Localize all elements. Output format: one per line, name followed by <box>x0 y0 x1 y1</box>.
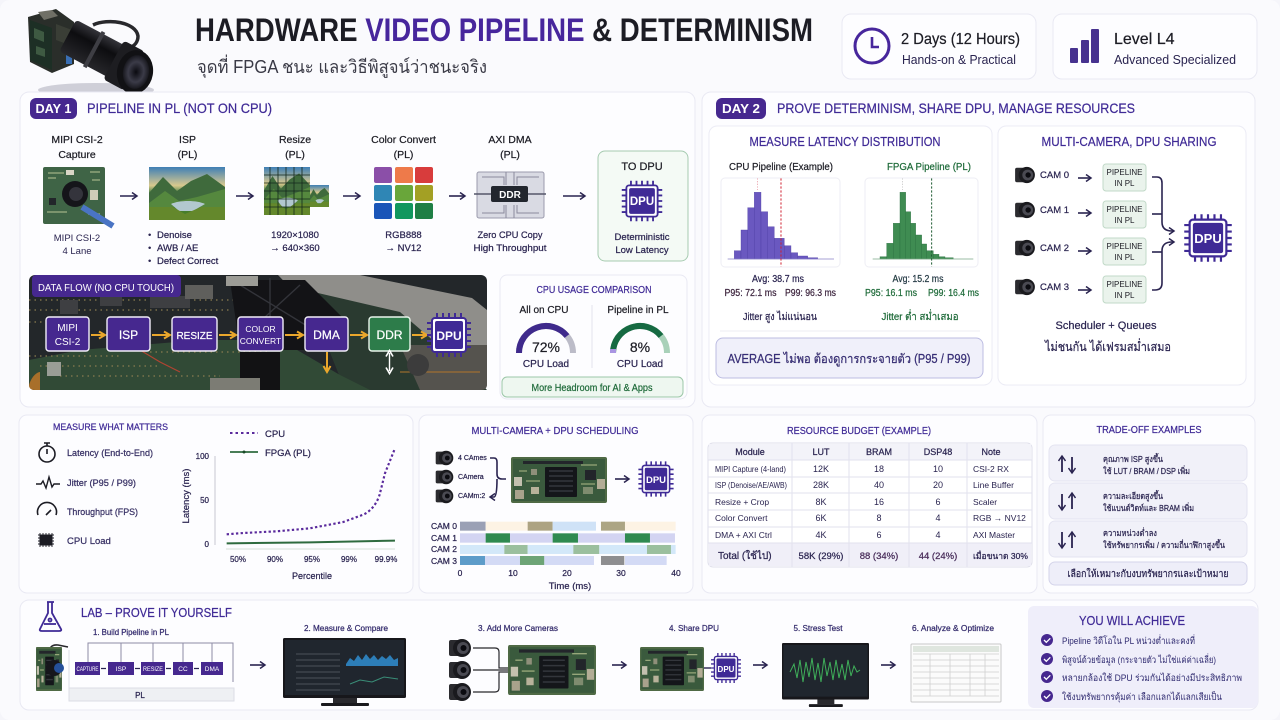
gantt chart: 0 <box>458 568 463 578</box>
stage: AXI DMA: DDR <box>499 190 522 201</box>
panel: measure what matters: Throughput (FPS) <box>67 507 138 518</box>
stage: resize: Resize <box>279 134 311 146</box>
panel: multi-camera DPU sharing: MULTI-CAMERA, DPU SHARING <box>1042 134 1216 149</box>
stage: MIPI capture: 4 Lane <box>62 246 92 257</box>
stats: CPU: Avg: 38.7 ms <box>752 274 804 285</box>
to DPU card: TO DPU <box>621 161 663 173</box>
step 5: stress test: 5. Stress Test <box>794 623 843 633</box>
stage: MIPI capture: MIPI CSI-2 <box>51 134 103 146</box>
panel: CPU usage comparison: CPU USAGE COMPARISON <box>536 285 652 296</box>
camera rows: IN PL <box>1114 179 1135 188</box>
stage: MIPI capture: Capture <box>58 149 96 161</box>
duration card: Hands-on & Practical <box>902 53 1016 67</box>
background photo: board <box>29 275 487 390</box>
day 2 heading: PROVE DETERMINISM, SHARE DPU, MANAGE RESOURCES <box>777 100 1135 116</box>
table: 10 <box>933 464 943 474</box>
panel: latency distribution: FPGA Pipeline (PL) <box>887 161 971 173</box>
panel: day 2 <box>702 92 1255 407</box>
arrow <box>343 195 360 197</box>
trade-off: resolution: ความละเอียดสูงขึ้น <box>1103 490 1163 502</box>
table: 16 <box>874 497 884 507</box>
to DPU card: Low Latency <box>615 245 669 256</box>
gauge: all on CPU: 72% <box>532 339 560 355</box>
stage: resize <box>264 134 329 254</box>
table: DMA + AXI Ctrl <box>715 530 772 540</box>
icon: DPU: DPU <box>646 475 666 486</box>
stage: MIPI capture <box>43 134 113 257</box>
table: Line Buffer <box>973 480 1014 490</box>
line chart: latency by percentile: FPGA (PL) <box>265 448 311 459</box>
panel: trade-off examples <box>1043 415 1255 593</box>
gantt chart: 30 <box>616 568 626 578</box>
gantt chart: 10 <box>508 568 518 578</box>
histogram: CPU <box>721 178 840 267</box>
flow nodes: RESIZE <box>176 331 213 342</box>
arrow <box>612 664 626 666</box>
flow nodes: MIPI <box>57 323 78 334</box>
stage: resize: → 640×360 <box>270 243 320 254</box>
table: Color Convert <box>715 513 768 523</box>
camera rows: PIPELINE <box>1106 168 1143 177</box>
day 2 badge <box>716 98 766 119</box>
stats: FPGA: Avg: 15.2 ms <box>892 274 944 285</box>
hero image: camera module <box>28 9 157 97</box>
to DPU card <box>598 151 688 261</box>
line chart: latency by percentile <box>181 429 397 581</box>
panel: measure what matters <box>19 415 413 593</box>
line chart: latency by percentile: 95% <box>304 555 320 564</box>
stats: CPU <box>724 274 836 323</box>
data flow label: DATA FLOW (NO CPU TOUCH) <box>38 282 174 294</box>
panel: lab <box>20 600 1258 710</box>
stage: AXI DMA: AXI DMA <box>488 134 532 146</box>
camera rows: CAM 3 <box>1040 282 1069 293</box>
stage: resize: (PL) <box>285 149 305 161</box>
table: 6 <box>876 530 882 540</box>
step 1: build pipeline <box>36 627 234 701</box>
icon: DPU <box>638 461 674 497</box>
duration card <box>842 14 1036 79</box>
achievement 1: Pipeline วิดีโอใน PL หน่วงต่ำและคงที่ <box>1062 634 1195 647</box>
flow nodes: ISP <box>119 328 138 342</box>
gantt chart: CAM 1 <box>431 533 457 543</box>
step 2: measure and compare <box>283 623 406 706</box>
stage: AXI DMA: (PL) <box>500 149 520 161</box>
stage: resize: 1920×1080 <box>271 230 319 241</box>
camera rows: IN PL <box>1114 291 1135 300</box>
table: MIPI Capture (4-land) <box>715 464 786 474</box>
stage: ISP: • <box>148 243 151 254</box>
line chart: latency by percentile: Latency (ms) <box>181 469 192 523</box>
achievement 3 <box>1041 671 1242 684</box>
table: Note <box>981 447 1001 457</box>
table: Resize + Crop <box>715 497 769 507</box>
gantt chart: 40 <box>671 568 681 578</box>
line chart: latency by percentile: 50% <box>230 555 246 564</box>
panel: resource budget <box>702 415 1037 593</box>
flow nodes: DMA <box>313 328 340 342</box>
step 3: add more cameras <box>449 623 596 701</box>
table: 8 <box>876 513 882 523</box>
camera rows: PIPELINE <box>1106 205 1143 214</box>
icon: stopwatch <box>39 443 55 462</box>
camera rows: CAM 1 <box>1040 205 1069 216</box>
level card: Level L4 <box>1114 31 1175 48</box>
camera rows <box>1015 164 1146 303</box>
trade-off: resolution <box>1049 483 1247 519</box>
table: RGB → NV12 <box>973 513 1026 523</box>
table: Module <box>735 447 765 457</box>
step 5: stress test <box>782 623 869 707</box>
trade-off summary: เลือกให้เหมาะกับงบทรัพยากรและเป้าหมาย <box>1068 568 1228 580</box>
stage: ISP: Defect Correct <box>157 256 219 267</box>
histogram: FPGA <box>865 178 978 267</box>
stage: color convert <box>371 134 436 254</box>
panel: latency distribution: MEASURE LATENCY DISTRIBUTION <box>750 134 940 149</box>
icon: level bars <box>1070 29 1099 63</box>
arrow <box>563 195 585 197</box>
icon: jitter <box>36 477 60 488</box>
panel: measure what matters: Jitter (P95 / P99) <box>67 478 136 489</box>
table: 6 <box>935 497 941 507</box>
line chart: latency by percentile: 90% <box>267 555 283 564</box>
step 1: build pipeline: ISP <box>116 666 126 673</box>
table: 12K <box>813 464 829 474</box>
stage: color convert: Color Convert <box>371 134 436 146</box>
title: HARDWARE VIDEO PIPELINE & DETERMINISM <box>195 12 813 48</box>
table: 8K <box>815 497 827 507</box>
panel: multi-camera scheduling <box>419 415 693 593</box>
cameras <box>436 451 487 503</box>
day 1 badge: DAY 1 <box>36 102 72 116</box>
step 6: analyze: 6. Analyze & Optimize <box>912 623 994 633</box>
table: Scaler <box>973 497 997 507</box>
panel: data flow <box>29 275 487 390</box>
gantt chart: CAM 3 <box>431 556 457 566</box>
gauge: pipeline in PL: 8% <box>630 339 650 355</box>
camera rows: IN PL <box>1114 253 1135 262</box>
flow nodes: DDR <box>376 328 403 342</box>
trade-off: ISP quality <box>1049 445 1247 481</box>
bracket arrow <box>490 458 506 497</box>
flow nodes: COLOR <box>245 324 276 334</box>
stage: ISP: Denoise <box>157 230 192 241</box>
achievement 2: พิสูจน์ด้วยข้อมูล (กระจายตัว ไม่ใช่แค่ค่าเฉลี่ย) <box>1062 653 1216 666</box>
cameras: CAmera <box>458 474 484 481</box>
trade-off: latency: ความหน่วงต่ำลง <box>1103 527 1157 538</box>
stats: FPGA: Jitter ต่ำ สม่ำเสมอ <box>882 309 958 323</box>
panel: trade-off examples: TRADE-OFF EXAMPLES <box>1096 424 1202 436</box>
panel: multi-camera scheduling: MULTI-CAMERA + DPU SCHEDULING <box>472 425 638 437</box>
line chart: latency by percentile: 99% <box>341 555 357 564</box>
step 1: build pipeline: CAPTURE <box>76 667 98 673</box>
step 4: share DPU: DPU <box>718 665 735 674</box>
camera rows: PIPELINE <box>1106 280 1143 289</box>
icon: DPU: DPU <box>1194 231 1222 246</box>
stats: CPU: Jitter สูง ไม่แน่นอน <box>743 310 817 323</box>
level card: Advanced Specialized <box>1114 53 1236 67</box>
step 4: share DPU <box>640 623 741 691</box>
step 1: build pipeline: RESIZE <box>143 667 163 673</box>
arrow <box>120 195 137 197</box>
achievement 4 <box>1041 690 1222 703</box>
callout: average not enough <box>716 338 983 378</box>
panel: measure what matters: Latency (End-to-End) <box>67 448 153 459</box>
table <box>708 443 1032 567</box>
stats: CPU: P99: 96.3 ms <box>785 288 836 299</box>
stage: color convert: → NV12 <box>386 243 421 254</box>
line chart: latency by percentile: 100 <box>196 452 210 461</box>
headroom callout <box>502 377 683 397</box>
gauge: all on CPU: CPU Load <box>523 359 569 370</box>
panel: CPU usage comparison: Pipeline in PL <box>607 305 669 316</box>
step 1: build pipeline: CC <box>178 666 188 673</box>
gantt chart: Time (ms) <box>549 581 591 592</box>
panel: multi-camera DPU sharing: Scheduler + Queues <box>1056 320 1157 332</box>
stage: AXI DMA: Zero CPU Copy <box>478 230 543 241</box>
panel: latency distribution <box>709 126 992 385</box>
trade-off: resolution: ใช้แบนด์วิดท์และ BRAM เพิ่ม <box>1103 502 1194 513</box>
icon: flask <box>40 602 61 631</box>
table: 4 <box>935 530 941 540</box>
table: 18 <box>874 464 884 474</box>
camera rows: CAM 2 <box>1040 243 1069 254</box>
stats: FPGA: P95: 16.1 ms <box>865 288 917 299</box>
line chart: latency by percentile: CPU <box>265 429 285 440</box>
trade-off: ISP quality: ใช้ LUT / BRAM / DSP เพิ่ม <box>1103 465 1190 476</box>
panel: measure what matters: CPU Load <box>67 536 111 547</box>
arrow <box>753 664 767 666</box>
trade-off summary <box>1049 562 1247 585</box>
stage: ISP: • <box>148 256 151 267</box>
achievement 1 <box>1041 634 1195 647</box>
flow nodes: CONVERT <box>240 336 281 346</box>
table: 88 (34%) <box>860 551 898 562</box>
duration card: 2 Days (12 Hours) <box>901 31 1020 48</box>
table: Total (ใช้ไป) <box>718 550 772 562</box>
table: 4K <box>815 530 827 540</box>
trade-off: latency <box>1049 521 1247 557</box>
camera rows: PIPELINE <box>1106 242 1143 251</box>
lab heading: LAB – PROVE IT YOURSELF <box>81 606 232 620</box>
arrow <box>449 195 465 197</box>
step 1: build pipeline: DMA <box>205 666 220 673</box>
line chart: latency by percentile: 0 <box>205 540 210 549</box>
level card <box>1053 14 1257 79</box>
table: ISP (Denoise/AE/AWB) <box>715 480 787 490</box>
gantt chart: 20 <box>562 568 572 578</box>
table: AXI Master <box>973 530 1015 540</box>
gauge: pipeline in PL: CPU Load <box>617 359 663 370</box>
stats: CPU: P95: 72.1 ms <box>724 288 776 299</box>
to DPU card: DPU <box>630 196 654 208</box>
cameras: 4 CAmes <box>458 455 487 462</box>
table: เมื่อขนาด 30% <box>973 550 1028 561</box>
stage: color convert: RGB888 <box>385 230 422 241</box>
stats: FPGA <box>865 274 979 323</box>
achievement 4: ใช้งบทรัพยากรคุ้มค่า เลือกแลกได้แลกเสียเป็น <box>1062 690 1222 703</box>
panel: latency distribution: CPU Pipeline (Example) <box>729 161 833 173</box>
achievement 2 <box>1041 653 1216 666</box>
callout: average not enough: AVERAGE ไม่พอ ต้องดูการกระจายตัว (P95 / P99) <box>728 352 970 367</box>
icon: clock <box>855 29 889 63</box>
step 3: add more cameras: 3. Add More Cameras <box>478 623 558 633</box>
gantt chart: CAM 0 <box>431 521 457 531</box>
flow nodes: CSI-2 <box>55 337 81 348</box>
panel: day 1 <box>20 92 695 407</box>
stage: ISP: (PL) <box>178 149 197 161</box>
camera rows: IN PL <box>1114 216 1135 225</box>
stage: color convert: (PL) <box>394 149 413 161</box>
line chart: latency by percentile: 50 <box>200 496 210 505</box>
step 2: measure and compare: 2. Measure & Compare <box>304 623 388 633</box>
panel: CPU usage comparison <box>500 275 687 399</box>
panel: you will achieve: YOU WILL ACHIEVE <box>1079 613 1185 628</box>
panel: measure what matters: MEASURE WHAT MATTERS <box>53 422 168 433</box>
step 6: analyze <box>911 623 1001 702</box>
table: 6K <box>815 513 827 523</box>
step 4: share DPU: 4. Share DPU <box>669 623 719 633</box>
stage: ISP: ISP <box>179 134 196 146</box>
arrow <box>615 478 629 480</box>
stats: FPGA: P99: 16.4 ms <box>928 288 979 299</box>
camera rows: CAM 0 <box>1040 170 1069 181</box>
cameras: CAMm:2 <box>458 493 485 500</box>
arrow <box>881 664 895 666</box>
icon: DPU <box>1184 214 1232 262</box>
stage: AXI DMA: High Throughput <box>474 243 547 254</box>
table: 20 <box>933 480 943 490</box>
stage: ISP: • <box>148 230 151 241</box>
trade-off: latency: ใช้ทรัพยากรเพิ่ม / ความถี่นาฬิกาสูงขึ้น <box>1103 539 1225 551</box>
table: 4 <box>935 513 941 523</box>
line chart: latency by percentile: Percentile <box>292 571 332 581</box>
table: 44 (24%) <box>919 551 957 562</box>
subtitle: จุดที่ FPGA ชนะ และวิธีพิสูจน์ว่าชนะจริง <box>197 54 487 78</box>
table: 40 <box>874 480 884 490</box>
stage: MIPI capture: MIPI CSI-2 <box>54 233 100 244</box>
arrow <box>250 664 265 666</box>
flow nodes <box>46 313 471 372</box>
step 1: build pipeline: PL <box>135 691 145 700</box>
panel: CPU usage comparison: All on CPU <box>520 305 568 316</box>
table: LUT <box>812 447 830 457</box>
table: DSP48 <box>924 447 952 457</box>
stage: ISP: AWB / AE <box>157 243 198 254</box>
arrow <box>236 195 253 197</box>
gantt chart: CAM 2 <box>431 544 457 554</box>
connectors to DPU <box>1152 177 1174 290</box>
step 1: build pipeline: 1. Build Pipeline in PL <box>93 627 169 637</box>
trade-off: ISP quality: คุณภาพ ISP สูงขึ้น <box>1103 453 1163 465</box>
table: BRAM <box>866 447 892 457</box>
board <box>511 457 607 503</box>
table: 28K <box>813 480 829 490</box>
day 2 badge: DAY 2 <box>722 102 760 116</box>
gauge: all on CPU <box>519 326 573 370</box>
stage: ISP <box>148 134 225 267</box>
panel: multi-camera DPU sharing: ไม่ชนกัน ได้เฟรมสม่ำเสมอ <box>1044 338 1171 354</box>
line chart: latency by percentile: 99.9% <box>375 555 397 564</box>
achievement 3: หลายกล้องใช้ DPU ร่วมกันได้อย่างมีประสิทธิภาพ <box>1062 672 1242 684</box>
icon: CPU chip <box>38 533 54 547</box>
panel: resource budget: RESOURCE BUDGET (EXAMPLE) <box>787 425 931 437</box>
day 1 heading: PIPELINE IN PL (NOT ON CPU) <box>87 100 272 116</box>
table: CSI-2 RX <box>973 464 1009 474</box>
gauge: pipeline in PL <box>613 326 667 370</box>
gantt chart <box>431 521 681 592</box>
stage: AXI DMA <box>474 134 547 254</box>
table: 58K (29%) <box>799 551 843 562</box>
day 1 badge <box>30 98 77 119</box>
icon: gauge <box>38 502 56 515</box>
to DPU card: Deterministic <box>615 232 670 243</box>
panel: you will achieve <box>1028 606 1258 708</box>
panel: multi-camera DPU sharing <box>998 126 1246 385</box>
flow nodes: DPU <box>436 329 462 343</box>
data flow label <box>32 275 181 297</box>
headroom callout: More Headroom for AI & Apps <box>532 383 652 394</box>
